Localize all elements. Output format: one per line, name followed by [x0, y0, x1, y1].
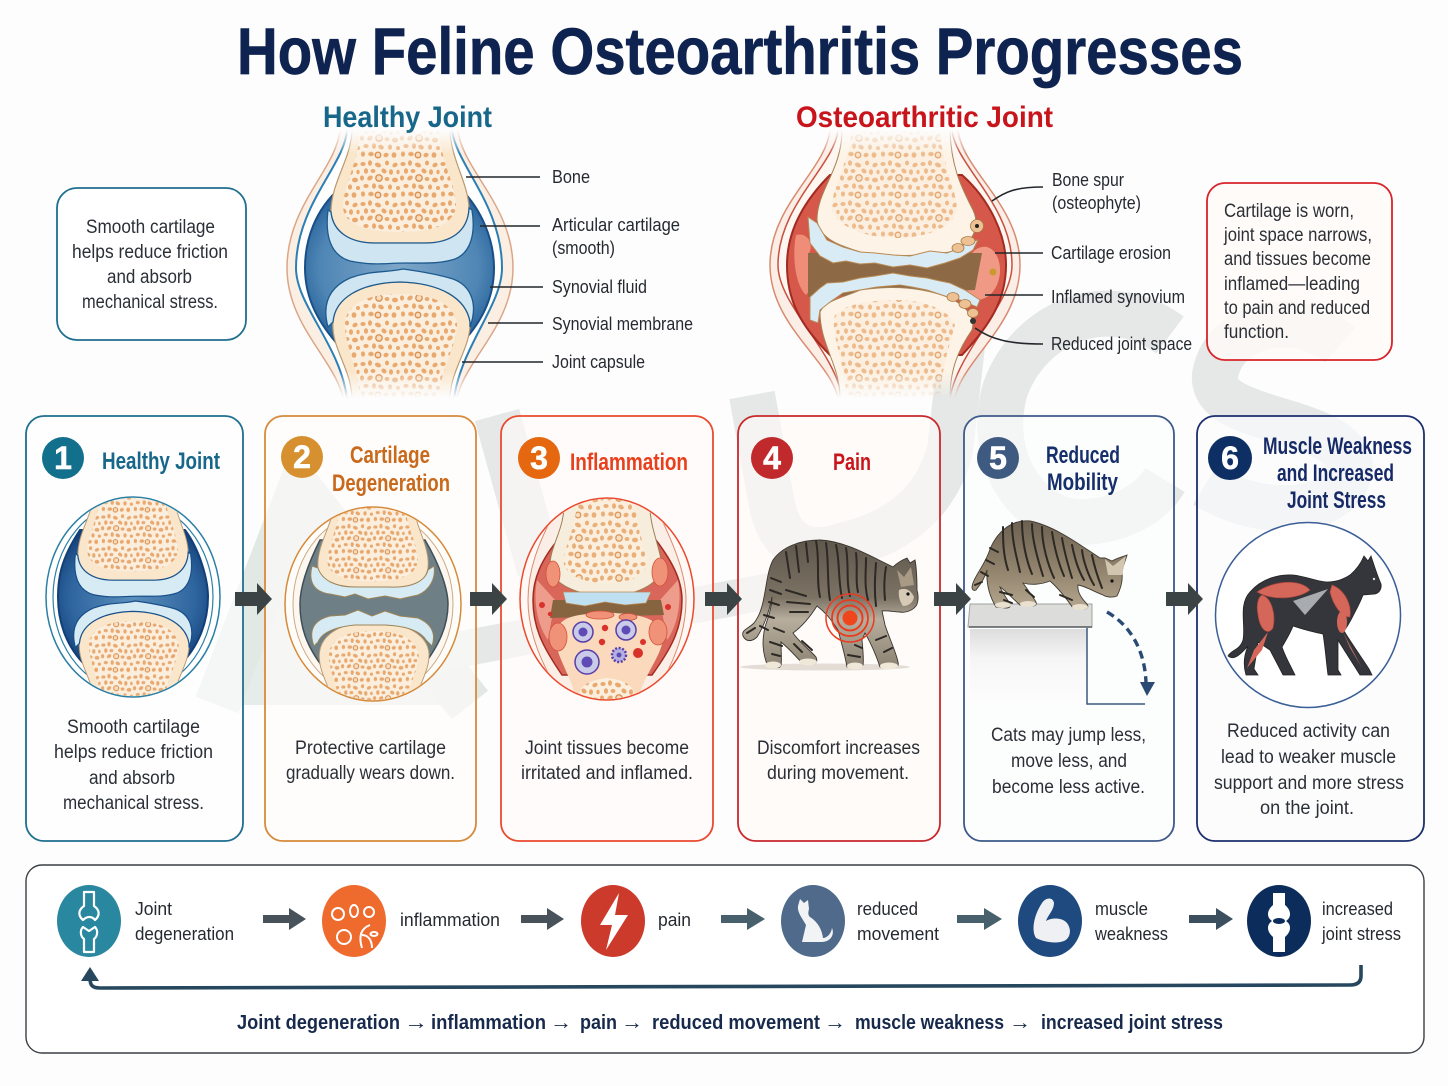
step number 2: [281, 436, 323, 478]
step description: [991, 725, 1146, 798]
step heading: Healthy Joint: [102, 448, 220, 475]
step heading: [1046, 442, 1120, 496]
callout: healthy cartilage: and absorb: [107, 267, 192, 288]
step description: [521, 738, 693, 784]
callout: healthy cartilage: Smooth cartilage: [86, 217, 215, 238]
callout: osteoarthritis effects: [1207, 183, 1392, 360]
labels: healthy joint: Articular cartilage: [552, 214, 680, 235]
step heading: Cartilage: [350, 442, 430, 469]
step description: become less active.: [992, 777, 1145, 798]
step description: Discomfort increases: [757, 738, 920, 759]
labels: healthy joint: Synovial membrane: [552, 313, 693, 334]
step number 1: [42, 437, 84, 479]
label: weakness: [1094, 923, 1168, 944]
step description: Joint tissues become: [525, 738, 689, 759]
step heading: and Increased: [1277, 460, 1394, 487]
step heading: Joint Stress: [1287, 487, 1386, 514]
panel: vicious cycle summary: [26, 865, 1424, 1053]
step heading: Pain: [833, 449, 871, 476]
summary sentence: Joint degeneration: [237, 1012, 400, 1034]
label: [1321, 898, 1401, 944]
label: reduced: [857, 898, 918, 919]
summary sentence: reduced movement: [652, 1012, 820, 1034]
arrow: step 5 to 6: [1166, 583, 1203, 615]
joint illustration: [46, 490, 220, 704]
callout: osteoarthritis effects: inflamed—leading: [1224, 274, 1360, 295]
label: increased: [1322, 898, 1393, 919]
panel: step 4 pain: [738, 416, 940, 841]
step description: lead to weaker muscle: [1221, 747, 1396, 768]
heading: healthy joint: Healthy Joint: [323, 101, 492, 134]
label: movement: [857, 923, 939, 944]
arrow: [957, 908, 1002, 930]
callout: osteoarthritis effects: function.: [1224, 322, 1289, 343]
labels: osteoarthritic joint: Reduced joint space: [1051, 333, 1192, 354]
step heading: Degeneration: [332, 470, 450, 497]
summary sentence: inflammation: [431, 1012, 546, 1034]
illustration: limping tabby cat with pain target: [740, 540, 918, 670]
callout: healthy cartilage: [57, 188, 246, 340]
illustration: cat hesitating on ledge: [968, 521, 1155, 704]
step description: gradually wears down.: [286, 763, 455, 784]
step description: Cats may jump less,: [991, 725, 1146, 746]
step description: helps reduce friction: [54, 742, 213, 763]
step number 2: 2: [293, 439, 311, 475]
step description: [286, 738, 455, 784]
step heading: Reduced: [1046, 442, 1120, 469]
step description: move less, and: [1011, 751, 1127, 772]
step heading: [1263, 433, 1412, 514]
summary sentence: →: [404, 1012, 428, 1034]
step description: irritated and inflamed.: [521, 763, 693, 784]
summary sentence: pain: [580, 1012, 617, 1034]
callout: osteoarthritis effects: joint space narrows,: [1223, 225, 1372, 246]
step description: during movement.: [767, 763, 909, 784]
labels: osteoarthritic joint: Inflamed synovium: [1051, 286, 1185, 307]
step number 4: 4: [763, 440, 781, 476]
step description: [54, 717, 213, 814]
label: pain: [658, 909, 691, 930]
joint illustration: [285, 500, 461, 714]
icon: increased joint stress: [1247, 885, 1311, 957]
arrow: [1189, 908, 1233, 930]
panel: step 1 healthy joint: [26, 416, 243, 841]
step number 6: [1208, 436, 1252, 480]
arrow: step 4 to 5: [934, 583, 971, 615]
step number 3: 3: [530, 440, 548, 476]
callout: osteoarthritis effects: Cartilage is worn,: [1224, 201, 1354, 222]
summary sentence: →: [824, 1012, 846, 1034]
label: [135, 898, 234, 944]
icon: joint degeneration: [57, 885, 121, 957]
joint illustration: [520, 498, 694, 702]
labels: healthy joint: (smooth): [552, 237, 615, 258]
step description: and absorb: [89, 768, 175, 789]
label: Joint: [135, 898, 172, 919]
callout: healthy cartilage: mechanical stress.: [82, 292, 218, 313]
step number 4: [751, 437, 793, 479]
label: joint stress: [1321, 923, 1401, 944]
label: [1094, 898, 1168, 944]
arrow: [721, 908, 765, 930]
icon: muscle weakness arm: [1018, 885, 1082, 957]
step heading: Mobility: [1047, 469, 1119, 496]
labels: osteoarthritic joint: (osteophyte): [1052, 192, 1141, 213]
diagram: osteoarthritic joint anatomy: [770, 130, 1020, 398]
panel: step 3 inflammation: [501, 416, 713, 841]
panel: step 5 reduced mobility: [964, 416, 1174, 841]
summary sentence: [237, 1012, 1223, 1034]
icon: pain lightning bolt: [581, 885, 645, 957]
panel: step 6 muscle weakness: [1197, 416, 1424, 841]
label: inflammation: [400, 909, 500, 930]
step description: Reduced activity can: [1227, 721, 1390, 742]
step number 1: 1: [54, 440, 72, 476]
arrow: [263, 908, 306, 930]
label: muscle: [1095, 898, 1148, 919]
step description: Protective cartilage: [295, 738, 446, 759]
labels: healthy joint: Synovial fluid: [552, 276, 647, 297]
feedback loop arrow: [81, 965, 1361, 988]
step heading: Inflammation: [570, 449, 688, 476]
icon: inflammation: [322, 885, 386, 957]
step description: support and more stress: [1214, 773, 1404, 794]
summary sentence: muscle weakness: [855, 1012, 1004, 1034]
callout: osteoarthritis effects: and tissues become: [1224, 249, 1371, 270]
step heading: [332, 442, 450, 497]
step number 3: [518, 437, 560, 479]
labels: osteoarthritic joint: Cartilage erosion: [1051, 242, 1171, 263]
summary sentence: →: [550, 1012, 572, 1034]
labels: osteoarthritic joint: Bone spur: [1052, 169, 1124, 190]
callout: osteoarthritis effects: to pain and reduced: [1224, 298, 1370, 319]
heading: osteoarthritic joint: Osteoarthritic Joint: [796, 101, 1053, 134]
step number 5: [977, 437, 1019, 479]
illustration: black cat showing muscles in circle: [1216, 522, 1400, 708]
summary sentence: →: [1009, 1012, 1031, 1034]
label: [857, 898, 939, 944]
step description: Smooth cartilage: [67, 717, 200, 738]
labels: healthy joint: [462, 166, 693, 372]
title: How Feline Osteoarthritis Progresses: [237, 14, 1243, 88]
arrow: [521, 908, 564, 930]
step number 5: 5: [989, 440, 1007, 476]
step description: on the joint.: [1260, 798, 1354, 819]
labels: osteoarthritic joint: [975, 169, 1192, 354]
label: degeneration: [135, 923, 234, 944]
step description: [1214, 721, 1404, 819]
icon: reduced movement cat: [781, 885, 845, 957]
arrow: step 1 to 2: [235, 583, 272, 615]
step description: mechanical stress.: [63, 793, 204, 814]
summary sentence: →: [621, 1012, 643, 1034]
summary sentence: increased joint stress: [1041, 1012, 1223, 1034]
step description: [757, 738, 920, 784]
callout: healthy cartilage: helps reduce friction: [72, 242, 228, 263]
labels: healthy joint: Bone: [552, 166, 590, 187]
labels: healthy joint: Joint capsule: [552, 351, 645, 372]
panel: step 2 cartilage degeneration: [265, 416, 476, 841]
diagram: healthy joint anatomy: [287, 130, 513, 398]
arrow: step 3 to 4: [705, 583, 742, 615]
arrow: step 2 to 3: [470, 583, 507, 615]
step number 6: 6: [1221, 440, 1239, 476]
